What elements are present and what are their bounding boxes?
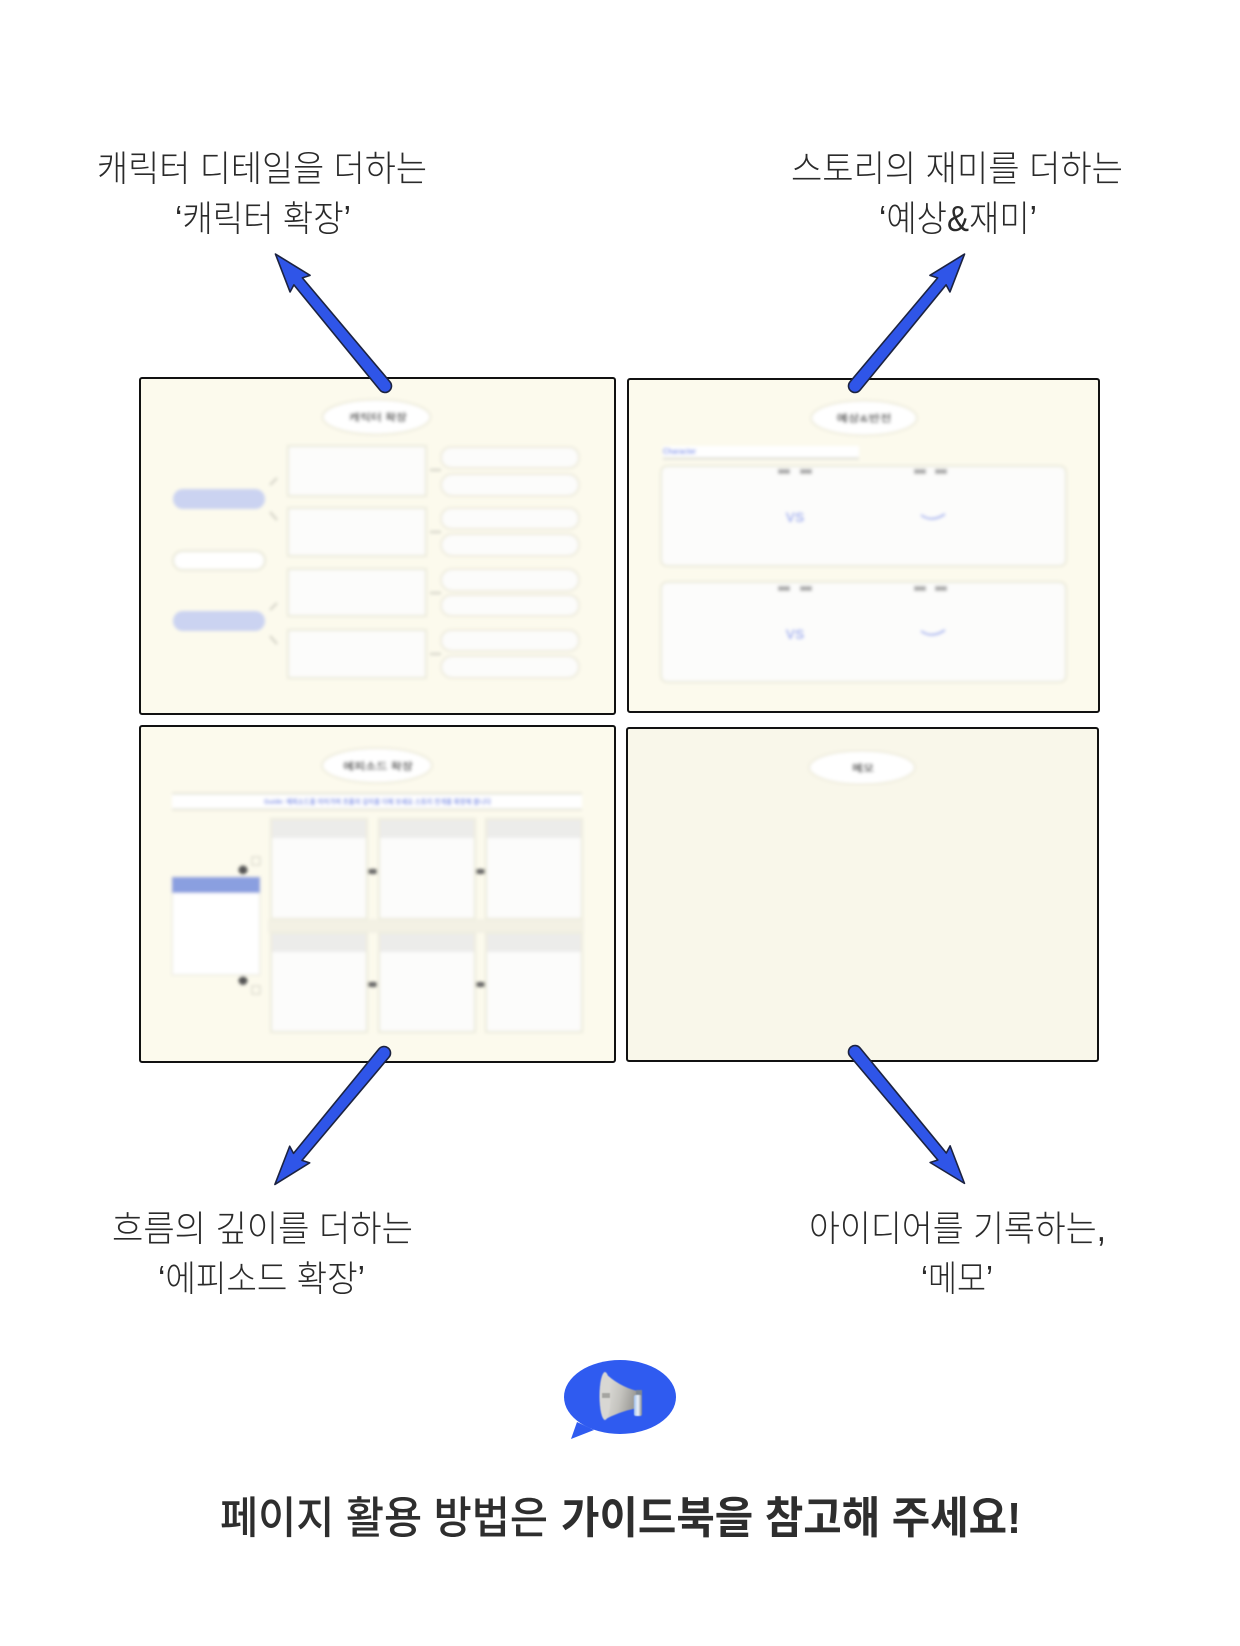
caption: flow depth: 흐름의 깊이를 더하는 [112,1208,413,1249]
instruction bar: Guide: 에피소드를 이어가며 흐름의 깊이를 더해 보세요 스토리 전개를 확장해 봅니다 [264,797,492,806]
footer message: 페이지 활용 방법은 [220,1494,548,1543]
caption: flow depth [112,1208,413,1299]
caption: suspense and fun: 스토리의 재미를 더하는 [791,148,1123,189]
caption: character expansion: ‘캐릭터 확장’ [175,198,351,239]
caption: flow depth: ‘에피소드 확장’ [158,1258,365,1299]
comparison card 1: VS [786,509,804,525]
caption: suspense and fun: ‘예상&재미’ [879,198,1037,239]
caption: character expansion: 캐릭터 디테일을 더하는 [97,148,427,189]
sub heading bar [663,446,859,460]
panel: character expansion [140,378,615,714]
panel title badge [811,400,917,436]
caption: character expansion [97,148,427,239]
panel title badge [322,400,430,434]
left card [172,877,260,975]
comparison card 1 [661,466,1066,566]
panel: suspense and fun [628,379,1099,712]
caption: memo: 아이디어를 기록하는, [809,1208,1106,1249]
panel: memo [627,728,1098,1061]
arrow: up-left to character expansion [265,246,399,399]
panel title badge: 캐릭터 확장 [349,411,407,424]
dots [238,857,260,994]
arrow: down-right to memo [841,1039,974,1192]
footer message [220,1494,1021,1543]
middle boxes [288,446,426,678]
panel title badge: 에피소드 확장 [343,760,413,773]
row band [268,919,584,933]
left pills [173,489,265,631]
caption: memo [809,1208,1106,1299]
right pills [441,447,579,678]
comparison card 2: VS [786,626,804,642]
step connectors [368,869,485,987]
comparison card 2 [661,582,1066,682]
sub heading bar: Character [663,447,696,456]
icon: megaphone speech bubble [564,1360,676,1439]
panel: episode expansion [140,726,615,1062]
panel title badge: 예상&반전 [836,412,892,425]
small branch arrows [270,470,441,654]
caption: suspense and fun [791,148,1123,239]
caption: memo: ‘메모’ [921,1258,993,1299]
instruction bar [172,792,582,811]
panel title badge: 메모 [852,762,874,775]
arrow: up-right to suspense and fun [841,246,975,399]
arrow: down-left to episode expansion [265,1040,398,1193]
footer message: 가이드북을 참고해 주세요! [561,1494,1021,1543]
step cards [271,819,582,1032]
panel title badge [322,748,432,783]
